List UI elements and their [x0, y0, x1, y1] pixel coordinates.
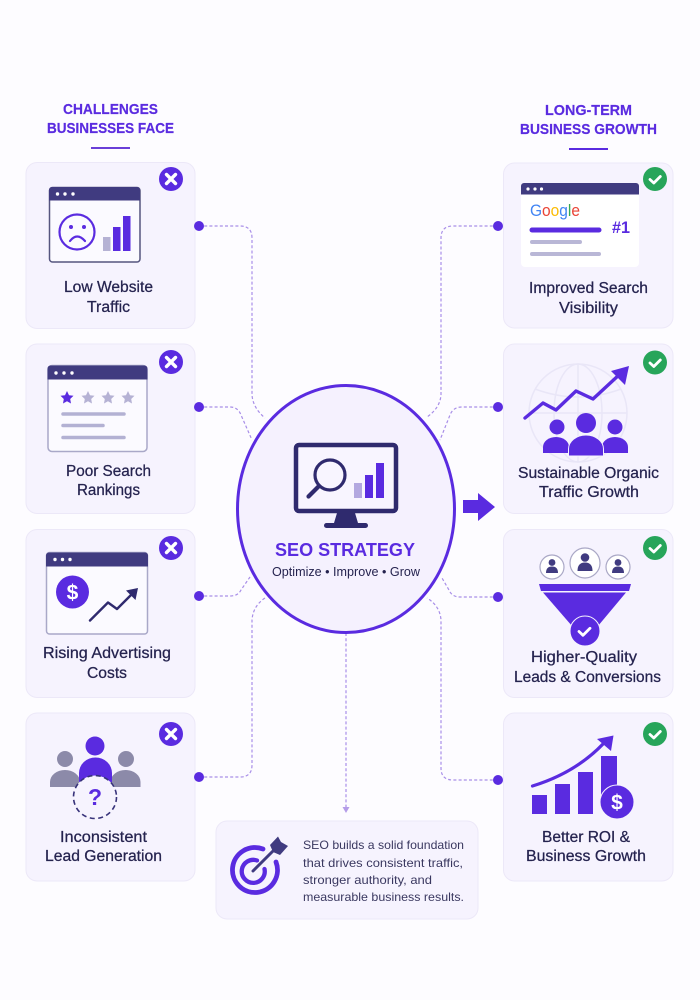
label: Inconsistent: [60, 829, 148, 846]
label: [526, 829, 646, 865]
right column heading: LONG-TERM: [545, 102, 632, 119]
icon: x badge: [159, 167, 183, 191]
label: Better ROI &: [542, 829, 631, 846]
connector: rising advertising costs: [194, 577, 250, 601]
icon: target with dart: [232, 836, 288, 893]
label: Rising Advertising: [43, 645, 171, 662]
label: [64, 279, 153, 316]
arrow: challenges to growth: [463, 493, 495, 521]
hub title: SEO STRATEGY: [275, 539, 416, 560]
icon: check badge: [643, 167, 667, 191]
label: Visibility: [559, 300, 618, 317]
right column heading: BUSINESS GROWTH: [520, 121, 657, 138]
summary text: SEO builds a solid foundation: [303, 838, 464, 852]
connector: higher quality leads: [442, 578, 503, 602]
panel: higher-quality leads and conversions: [504, 530, 673, 698]
connector: sustainable organic growth: [440, 402, 503, 440]
icon: rising cost window: [46, 552, 148, 634]
label: [45, 829, 162, 865]
right column heading: [520, 102, 657, 149]
icon: check badge: [643, 350, 667, 374]
arrow: strategy to summary: [342, 633, 350, 813]
panel: improved search visibility: [504, 163, 673, 328]
connector: inconsistent lead generation: [194, 598, 265, 782]
left column heading: CHALLENGES: [63, 101, 158, 118]
label: Poor Search: [66, 463, 151, 480]
icon: people with question mark: [50, 736, 140, 818]
icon: google result window: [521, 183, 639, 267]
panel: rising advertising costs: [26, 530, 195, 698]
icon: star rating window: [48, 366, 148, 452]
icon: rising cost window: $: [67, 582, 79, 604]
icon: lead funnel: [539, 548, 631, 646]
label: [66, 463, 151, 499]
panel: sustainable organic traffic growth: [504, 344, 673, 514]
icon: monitor with magnifier: [296, 445, 396, 528]
label: Costs: [87, 665, 127, 682]
label: [529, 280, 648, 317]
connector: low website traffic: [194, 221, 265, 418]
label: Leads & Conversions: [514, 669, 661, 686]
label: Traffic Growth: [539, 484, 639, 501]
connector: improved search visibility: [427, 221, 503, 417]
panel: low website traffic: [26, 162, 195, 328]
icon: google result window: #1: [612, 218, 630, 237]
hub subtitle: Optimize • Improve • Grow: [272, 565, 421, 579]
summary text: that drives consistent traffic,: [303, 856, 463, 870]
panel: inconsistent lead generation: [26, 713, 195, 881]
icon: globe, growth arrow and people: [525, 364, 629, 462]
label: [43, 645, 171, 682]
icon: rising bars with dollar: [532, 736, 634, 819]
icon: x badge: [159, 536, 183, 560]
summary text: stronger authority, and: [303, 873, 432, 887]
icon: rising bars with dollar: $: [611, 792, 623, 814]
icon: sad website window: [49, 187, 140, 262]
icon: check badge: [643, 722, 667, 746]
label: Rankings: [77, 482, 140, 499]
summary text: measurable business results.: [303, 890, 464, 904]
label: Higher-Quality: [531, 649, 637, 666]
label: Low Website: [64, 279, 153, 296]
icon: google result window: Google: [530, 201, 580, 220]
connector: better ROI: [427, 598, 503, 785]
panel: better ROI and business growth: [504, 713, 673, 881]
label: [514, 649, 661, 686]
left column heading: [47, 101, 174, 148]
label: Sustainable Organic: [518, 465, 659, 482]
icon: x badge: [159, 722, 183, 746]
left column heading: BUSINESSES FACE: [47, 120, 174, 137]
summary text: [303, 838, 464, 904]
icon: x badge: [159, 350, 183, 374]
label: [518, 465, 659, 501]
panel: poor search rankings: [26, 344, 195, 514]
panel: SEO strategy hub: [238, 386, 454, 632]
panel: summary callout: [216, 821, 478, 919]
label: Traffic: [87, 299, 130, 316]
connector: poor search rankings: [194, 402, 252, 440]
label: Improved Search: [529, 280, 648, 297]
label: Lead Generation: [45, 848, 162, 865]
label: Business Growth: [526, 848, 646, 865]
icon: check badge: [643, 536, 667, 560]
icon: people with question mark: ?: [88, 784, 102, 810]
